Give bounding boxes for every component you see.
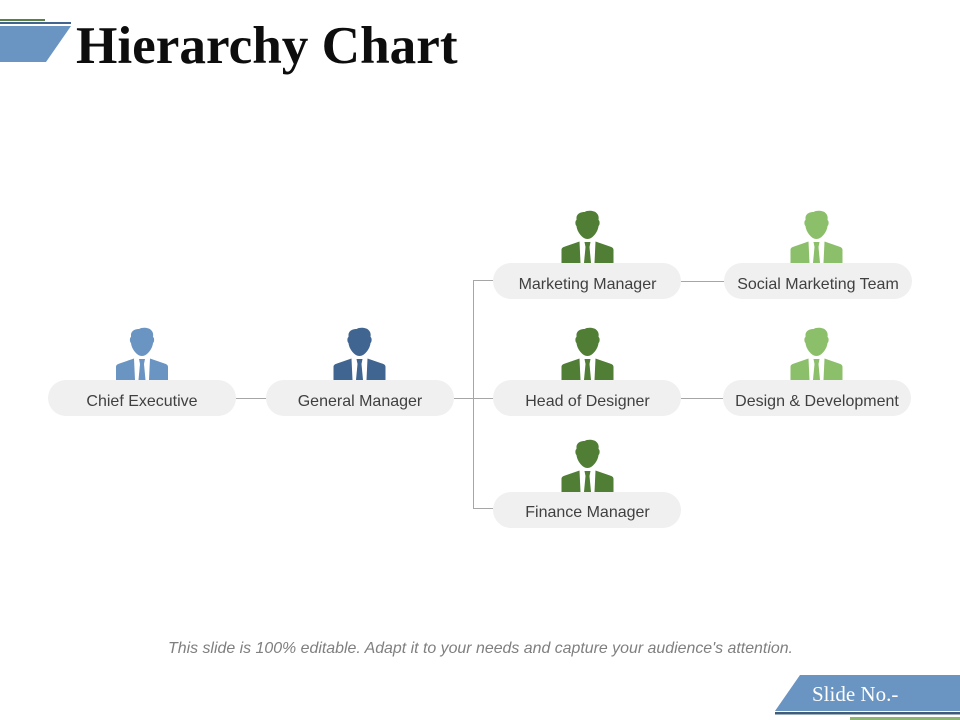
- header accent: [0, 19, 71, 62]
- node: Chief Executive: Chief Executive: [86, 393, 198, 410]
- icon: person light green: [790, 211, 842, 263]
- node: Design & Development: [723, 328, 911, 416]
- icon: person light green: [790, 328, 842, 380]
- node: General Manager: [266, 328, 454, 416]
- node: Finance Manager: Finance Manager: [525, 504, 650, 521]
- node: Finance Manager: [493, 440, 681, 528]
- node: Marketing Manager: Marketing Manager: [519, 276, 657, 293]
- footer slide number tab: Slide No.-: [812, 682, 898, 706]
- node: General Manager: General Manager: [298, 393, 423, 410]
- node: Head of Designer: [493, 328, 681, 416]
- node: Design & Development: Design & Development: [735, 393, 899, 410]
- node: Chief Executive: [48, 328, 236, 416]
- node: Social Marketing Team: [724, 211, 912, 299]
- caption: This slide is 100% editable. Adapt it to your needs and capture your audience's attention.: [168, 640, 793, 657]
- icon: person green: [562, 211, 614, 263]
- connector lines: [236, 280, 724, 508]
- node: Marketing Manager: [493, 211, 681, 299]
- node: Head of Designer: Head of Designer: [525, 393, 650, 410]
- footer slide number tab: [775, 675, 960, 720]
- title: Hierarchy Chart: [76, 16, 458, 75]
- icon: person dark blue: [334, 328, 386, 380]
- icon: person green: [562, 328, 614, 380]
- icon: person light blue: [116, 328, 168, 380]
- node: Social Marketing Team: Social Marketing Team: [737, 276, 899, 293]
- icon: person green: [562, 440, 614, 492]
